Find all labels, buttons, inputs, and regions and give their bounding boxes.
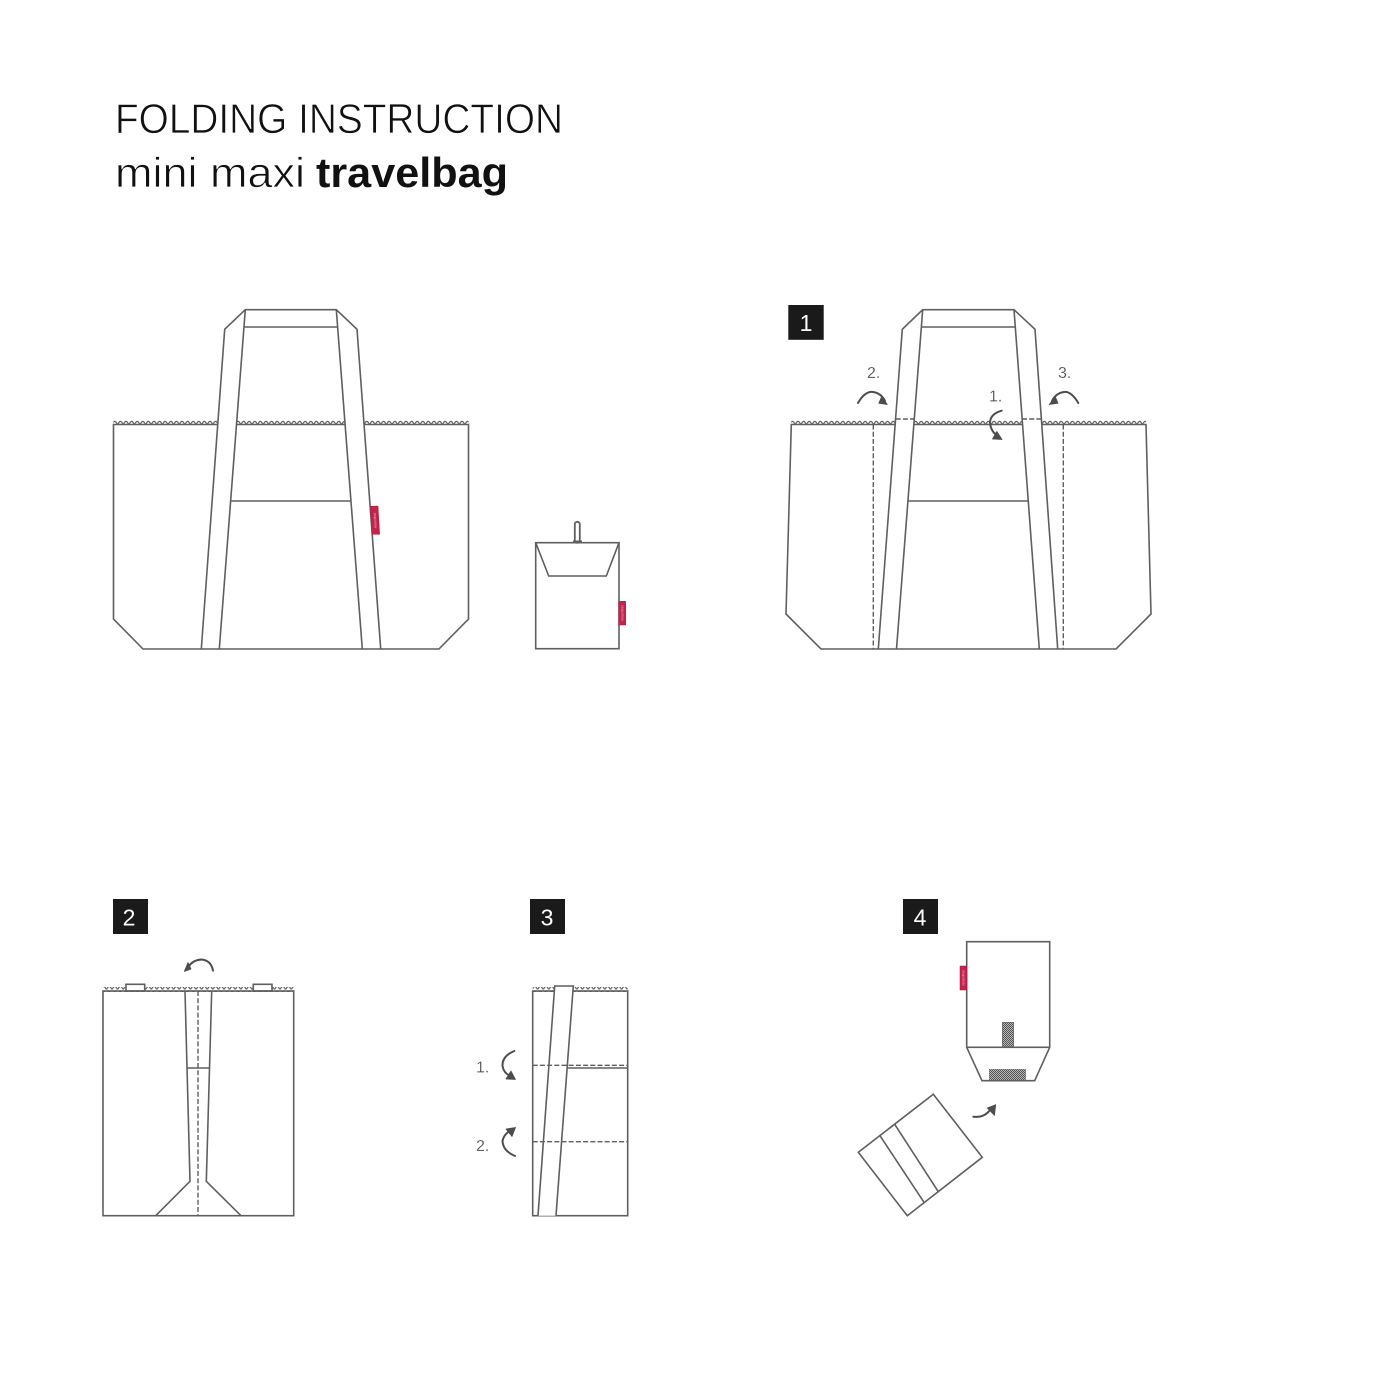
- bag with fold lines: [786, 310, 1151, 649]
- step badge 4: [903, 899, 938, 934]
- panel: step 2: [103, 899, 294, 1216]
- fold arrow 2: [858, 392, 887, 404]
- bag front view: [114, 310, 468, 649]
- red label on pouch: [960, 966, 967, 990]
- step badge 2: [113, 899, 148, 934]
- fold label 2: 2.: [867, 365, 880, 382]
- panel: step 3: [476, 899, 628, 1216]
- red label on pouch: reisenthel: [962, 970, 966, 986]
- step badge 3: [530, 899, 565, 934]
- open pouch: [967, 942, 1050, 1081]
- red label on pouch: reisenthel: [620, 605, 624, 621]
- fold arrow 3: [1049, 392, 1078, 404]
- title line: folding instruction: FOLDING INSTRUCTION: [115, 95, 563, 142]
- fold arrow 1: [502, 1051, 516, 1080]
- title line: travelbag: travelbag: [316, 149, 508, 196]
- step badge 1: 1: [800, 310, 812, 336]
- panel: unfolded bag and pouch: [114, 310, 626, 649]
- fold label 2: 2.: [476, 1138, 489, 1155]
- red label on bag: reisenthel: [373, 512, 378, 528]
- narrow folded bag with strap: [533, 986, 628, 1216]
- panel: step 1: [786, 305, 1151, 649]
- fold arrow 2: [502, 1128, 516, 1156]
- folded bag being inserted: [858, 1094, 982, 1216]
- title line: mini maxi: mini maxi: [115, 149, 305, 196]
- fold arrow 1: [990, 411, 1002, 440]
- step badge 2: 2: [123, 904, 135, 930]
- step badge 1: [788, 305, 824, 340]
- insert arrow: [973, 1105, 996, 1117]
- fold label 1: 1.: [989, 388, 1002, 406]
- step badge 4: 4: [914, 904, 927, 930]
- red label on pouch: [619, 601, 626, 625]
- panel: step 4: [858, 899, 1050, 1216]
- step badge 3: 3: [541, 904, 553, 930]
- folded pouch: [536, 522, 619, 649]
- fold label 1: 1.: [476, 1060, 489, 1076]
- folded bag with handle: [103, 984, 294, 1216]
- red label on bag: [370, 506, 380, 534]
- title: [115, 95, 563, 196]
- fold label 3: 3.: [1058, 365, 1071, 382]
- fold arrow: [184, 960, 213, 972]
